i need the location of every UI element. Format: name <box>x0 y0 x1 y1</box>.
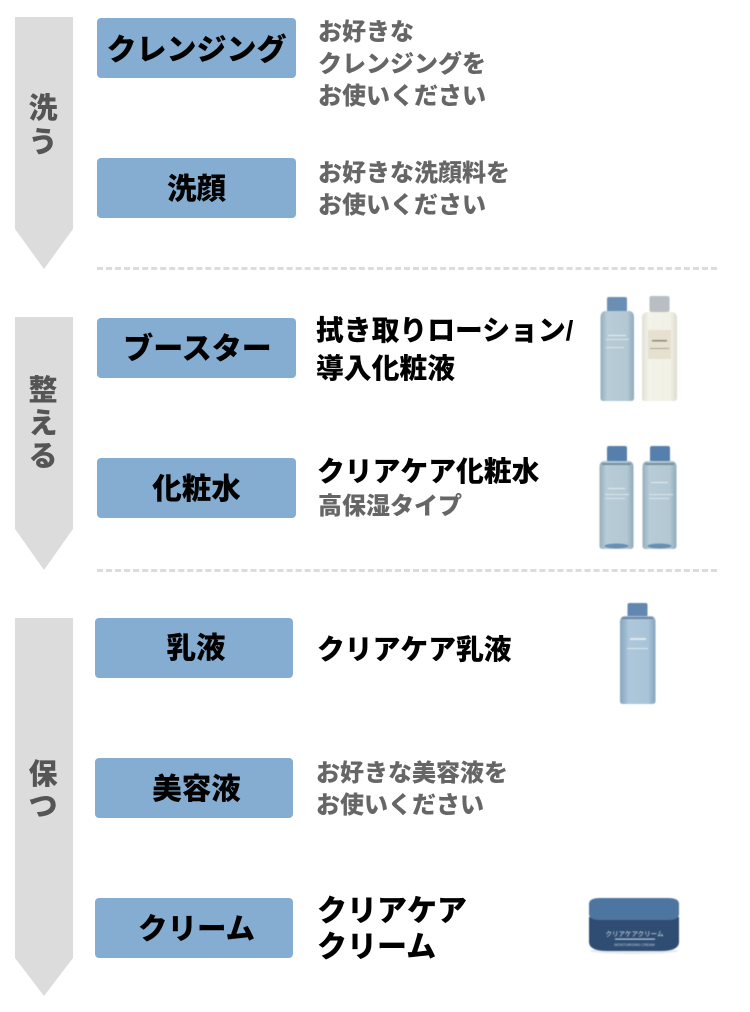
text: face wash note <box>318 160 510 219</box>
text: cream product: クリアケア <box>317 895 467 928</box>
icon: cream jar <box>589 898 679 954</box>
icon: toner bottle right <box>642 446 676 549</box>
step: booster <box>97 318 296 378</box>
text: cleansing note <box>318 19 486 110</box>
step: face wash: 洗顔 <box>167 173 226 206</box>
text: cleansing note: クレンジングを <box>318 51 486 78</box>
heading: keep <box>28 759 58 823</box>
step: cleansing: クレンジング <box>106 34 286 67</box>
text: booster product <box>316 315 574 384</box>
heading: prepare: る <box>28 441 58 473</box>
arrow: keep <box>15 618 73 996</box>
step: booster: ブースター <box>123 333 272 366</box>
heading: wash <box>28 93 58 159</box>
icon: cream jar: クリアケアクリーム <box>606 930 664 938</box>
step: cleansing <box>97 18 296 78</box>
step: milky lotion <box>95 618 293 678</box>
text: serum note: お好きな美容液を <box>316 760 508 787</box>
step: lotion: 化粧水 <box>152 473 241 506</box>
heading: keep: つ <box>28 791 58 823</box>
icon: cream jar: MOISTURISING CREAM <box>614 943 655 947</box>
step: cream <box>95 898 293 958</box>
step: serum: 美容液 <box>152 773 241 806</box>
text: face wash note: お使いください <box>318 192 486 219</box>
arrow: wash <box>15 17 73 269</box>
step: serum <box>95 758 293 818</box>
heading: prepare <box>28 375 58 473</box>
text: face wash note: お好きな洗顔料を <box>318 160 510 187</box>
icon: milky lotion bottle <box>620 603 656 704</box>
step: lotion <box>97 458 296 518</box>
text: serum note: お使いください <box>316 792 484 819</box>
heading: wash: う <box>28 127 58 159</box>
text: cream product: クリーム <box>317 931 436 964</box>
step: face wash <box>97 158 296 218</box>
heading: prepare: 整 <box>28 375 58 407</box>
heading: keep: 保 <box>28 759 58 791</box>
text: lotion type: 高保湿タイプ <box>318 493 462 520</box>
text: serum note <box>316 760 508 819</box>
arrow: prepare <box>15 317 73 570</box>
text: cleansing note: お好きな <box>318 19 414 46</box>
heading: prepare: え <box>28 408 58 440</box>
text: booster product: 導入化粧液 <box>316 353 455 384</box>
icon: toner bottle left <box>600 446 634 549</box>
icon: blue bottle wipe lotion <box>600 297 634 401</box>
icon: white bottle lotion <box>642 296 677 401</box>
step: cream: クリーム <box>138 913 255 946</box>
heading: wash: 洗 <box>28 93 58 125</box>
text: milky lotion product: クリアケア乳液 <box>317 634 512 665</box>
text: cream product <box>317 895 467 964</box>
text: cleansing note: お使いください <box>318 83 486 110</box>
text: lotion product: クリアケア化粧水 <box>317 456 539 487</box>
text: booster product: 拭き取りローション/ <box>316 315 573 346</box>
step: milky lotion: 乳液 <box>166 632 226 665</box>
